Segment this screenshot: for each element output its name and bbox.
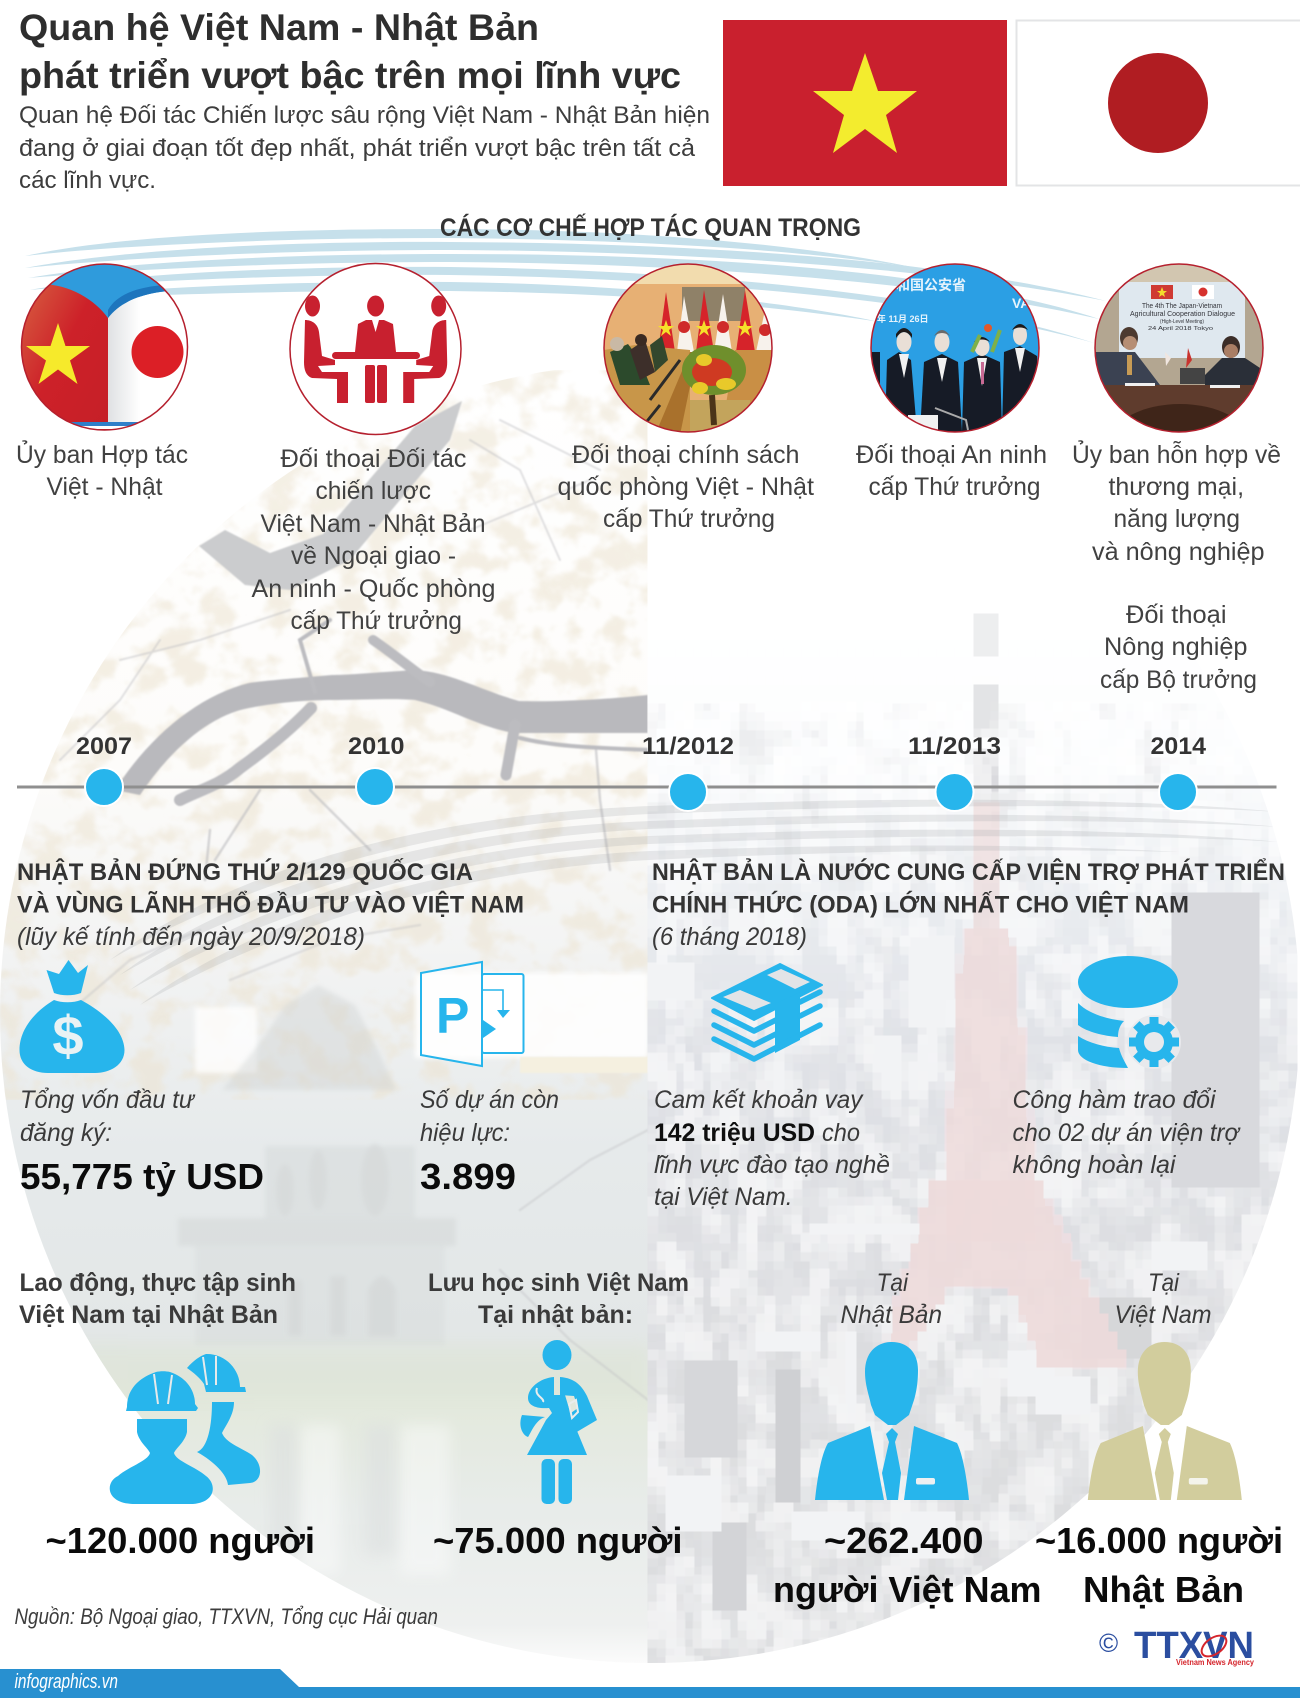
circle 5: agriculture dialogue photo: Agricultural Cooperation Dialogue xyxy=(1130,309,1235,318)
timeline dots xyxy=(85,768,1197,811)
circle 5: agriculture dialogue photo xyxy=(1094,263,1264,433)
title: Quan hệ Việt Nam - Nhật Bản xyxy=(19,7,539,48)
text: loan commitment: Cam kết khoản vay xyxy=(654,1086,864,1114)
icon: businessman, khaki xyxy=(1088,1342,1242,1500)
flag: Japan xyxy=(1016,20,1300,186)
caption: security dialogue xyxy=(856,441,1047,501)
flag: Vietnam xyxy=(723,20,1007,186)
tree branches xyxy=(60,420,648,1400)
caption: security dialogue: cấp Thứ trưởng xyxy=(868,473,1040,501)
intro text: Quan hệ Đối tác Chiến lược sâu rộng Việt Nam - Nhật Bản hiện xyxy=(19,102,710,129)
logo: TTXVN: © xyxy=(1099,1628,1118,1658)
stat: active projects: hiệu lực: xyxy=(420,1119,510,1147)
caption: joint committee and agriculture dialogue: Đối thoại xyxy=(1126,601,1226,629)
label: students in Japan: Lưu học sinh Việt Nam xyxy=(428,1269,689,1297)
icon: businessman, blue xyxy=(815,1342,969,1500)
caption: joint committee and agriculture dialogue: Ủy ban hỗn hợp về xyxy=(1072,439,1281,469)
footer bar: infographics.vn xyxy=(14,1671,118,1693)
title: phát triển vượt bậc trên mọi lĩnh vực xyxy=(19,55,681,96)
label: in Japan xyxy=(840,1269,942,1329)
light blue ribbons xyxy=(25,229,1106,343)
icon: stack of money xyxy=(712,964,822,1059)
caption: security dialogue: Đối thoại An ninh xyxy=(856,441,1047,469)
stat: Japanese in Vietnam: ~16.000 người xyxy=(1035,1520,1283,1561)
icon: money bag: $ xyxy=(52,1004,84,1067)
year labels: 2014 xyxy=(1150,733,1206,760)
label: in Japan: Tại xyxy=(876,1269,909,1297)
stat: Japanese in Vietnam: Nhật Bản xyxy=(1083,1569,1244,1610)
stat: active projects xyxy=(420,1086,559,1197)
caption: joint committee and agriculture dialogue: Nông nghiệp xyxy=(1104,633,1248,661)
text: loan commitment xyxy=(654,1086,890,1211)
stat: total registered capital: Tổng vốn đầu tư xyxy=(20,1086,196,1114)
stat: total registered capital: đăng ký: xyxy=(20,1119,112,1147)
caption: joint committee and agriculture dialogue: cấp Bộ trưởng xyxy=(1100,666,1257,694)
circle 4: security dialogue photo: VA xyxy=(1012,295,1030,311)
circle 4: security dialogue photo xyxy=(868,260,1043,440)
year labels: 2007 xyxy=(76,733,132,760)
label: in Japan: Nhật Bản xyxy=(840,1301,942,1329)
icon: workers xyxy=(110,1354,260,1504)
icon: project document xyxy=(421,962,524,1066)
heading: investment xyxy=(17,857,524,951)
heading: ODA: CHÍNH THỨC (ODA) LỚN NHẤT CHO VIỆT NAM xyxy=(652,890,1189,918)
stat: active projects: Số dự án còn xyxy=(420,1086,559,1114)
text: loan commitment: lĩnh vực đào tạo nghề xyxy=(654,1151,890,1179)
timeline xyxy=(17,733,1276,811)
stat: Vietnamese in Japan: người Việt Nam xyxy=(773,1569,1042,1610)
caption: defence policy dialogue: cấp Thứ trưởng xyxy=(603,505,775,533)
text: diplomatic notes: Công hàm trao đổi xyxy=(1012,1086,1217,1114)
caption: joint committee and agriculture dialogue: năng lượng xyxy=(1114,505,1240,533)
label: trainees in Japan xyxy=(19,1269,296,1329)
text: diplomatic notes: cho 02 dự án viện trợ xyxy=(1012,1119,1241,1147)
stat: Vietnamese in Japan: ~262.400 xyxy=(824,1520,984,1561)
caption: strategic partnership dialogue: An ninh - Quốc phòng xyxy=(252,575,496,603)
right photo: Tokyo, mosaic buildings and tower xyxy=(648,360,1300,1670)
heading: ODA: NHẬT BẢN LÀ NƯỚC CUNG CẤP VIỆN TRỢ PHÁT TRIỂN xyxy=(652,857,1285,886)
caption: Vietnam-Japan cooperation committee: Việt - Nhật xyxy=(46,473,163,501)
caption: defence policy dialogue: quốc phòng Việt - Nhật xyxy=(558,473,814,501)
label: students in Japan: Tại nhật bản: xyxy=(478,1301,633,1329)
caption: strategic partnership dialogue: cấp Thứ trưởng xyxy=(290,607,462,635)
circle 2: meeting icon xyxy=(290,264,461,434)
grey lower ribbons xyxy=(110,800,1280,1005)
caption: strategic partnership dialogue: Đối thoại Đối tác xyxy=(280,445,466,473)
circle 1: flags emblem xyxy=(20,262,190,432)
caption: strategic partnership dialogue xyxy=(252,445,496,635)
caption: Vietnam-Japan cooperation committee xyxy=(16,439,188,501)
label: in Vietnam xyxy=(1114,1269,1212,1329)
circle 5: agriculture dialogue photo: (High-Level Meeting) xyxy=(1160,319,1204,325)
icon: database with gear xyxy=(1078,956,1181,1069)
heading: ODA: (6 tháng 2018) xyxy=(652,923,807,951)
stat: active projects: 3.899 xyxy=(420,1156,516,1197)
icon: student xyxy=(520,1340,597,1504)
title xyxy=(19,7,681,96)
icon: money bag xyxy=(20,960,124,1073)
year labels xyxy=(76,733,1206,760)
text: loan commitment: tại Việt Nam. xyxy=(654,1183,792,1211)
stat: total registered capital xyxy=(20,1086,264,1197)
section heading: cooperation mechanisms: CÁC CƠ CHẾ HỢP TÁC QUAN TRỌNG xyxy=(440,213,861,242)
circle 3: defence dialogue photo xyxy=(603,263,773,433)
stat: Japanese in Vietnam xyxy=(1035,1520,1283,1610)
logo: TTXVN: TTXVN xyxy=(1134,1625,1254,1667)
heading: investment: (lũy kế tính đến ngày 20/9/2018) xyxy=(17,923,365,951)
year labels: 11/2013 xyxy=(908,733,1001,760)
intro text xyxy=(19,102,710,194)
logo: TTXVN: Vietnam News Agency xyxy=(1176,1658,1255,1667)
caption: joint committee and agriculture dialogue: thương mại, xyxy=(1108,473,1244,501)
intro text: các lĩnh vực. xyxy=(19,167,156,194)
text: diplomatic notes xyxy=(1012,1086,1241,1179)
left photo: Hanoi, cherry branches and Turtle Tower xyxy=(0,360,648,1670)
caption: strategic partnership dialogue: chiến lược xyxy=(316,477,431,505)
icon: project document: P xyxy=(436,988,469,1044)
intro text: đang ở giai đoạn tốt đẹp nhất, phát triển vượt bậc trên tất cả xyxy=(19,135,695,162)
text: loan commitment: 142 triệu USD xyxy=(654,1119,815,1147)
source note: Nguồn: Bộ Ngoại giao, TTXVN, Tổng cục Hải quan xyxy=(14,1604,438,1629)
circle 4: security dialogue photo: 年 11月 26日 xyxy=(877,313,929,324)
label: in Vietnam: Việt Nam xyxy=(1114,1301,1212,1329)
heading: ODA xyxy=(652,857,1285,951)
year labels: 11/2012 xyxy=(642,733,734,760)
caption: strategic partnership dialogue: về Ngoại giao - xyxy=(291,542,456,570)
label: in Vietnam: Tại xyxy=(1148,1269,1180,1297)
caption: defence policy dialogue xyxy=(558,441,814,533)
text: loan commitment: cho xyxy=(822,1119,860,1147)
label: students in Japan xyxy=(428,1269,689,1329)
circle 4: security dialogue photo: 和国公安省 xyxy=(896,277,966,293)
caption: joint committee and agriculture dialogue: và nông nghiệp xyxy=(1092,538,1264,566)
circle 5: agriculture dialogue photo: 24 April 2018 Tokyo xyxy=(1148,326,1213,332)
label: trainees in Japan: Lao động, thực tập sinh xyxy=(20,1269,296,1297)
caption: joint committee and agriculture dialogue xyxy=(1072,439,1281,694)
heading: investment: VÀ VÙNG LÃNH THỔ ĐẦU TƯ VÀO VIỆT NAM xyxy=(17,890,524,918)
stat: Vietnamese in Japan xyxy=(773,1520,1042,1610)
background circle: Hanoi and Tokyo photos xyxy=(0,360,1300,1670)
text: diplomatic notes: không hoàn lại xyxy=(1012,1151,1177,1179)
heading: investment: NHẬT BẢN ĐỨNG THỨ 2/129 QUỐC GIA xyxy=(17,857,473,886)
circle 5: agriculture dialogue photo: The 4th The Japan-Vietnam xyxy=(1142,301,1222,310)
caption: strategic partnership dialogue: Việt Nam - Nhật Bản xyxy=(260,510,486,538)
year labels: 2010 xyxy=(348,733,404,760)
stat: students count: ~75.000 người xyxy=(433,1520,682,1561)
thick arc branch xyxy=(199,401,462,590)
footer bar xyxy=(0,1669,1300,1698)
caption: Vietnam-Japan cooperation committee: Ủy ban Hợp tác xyxy=(16,439,188,469)
stat: workers count: ~120.000 người xyxy=(46,1520,315,1561)
stat: total registered capital: 55,775 tỷ USD xyxy=(20,1156,264,1197)
label: trainees in Japan: Việt Nam tại Nhật Bản xyxy=(19,1301,278,1329)
caption: defence policy dialogue: Đối thoại chính sách xyxy=(572,441,800,469)
